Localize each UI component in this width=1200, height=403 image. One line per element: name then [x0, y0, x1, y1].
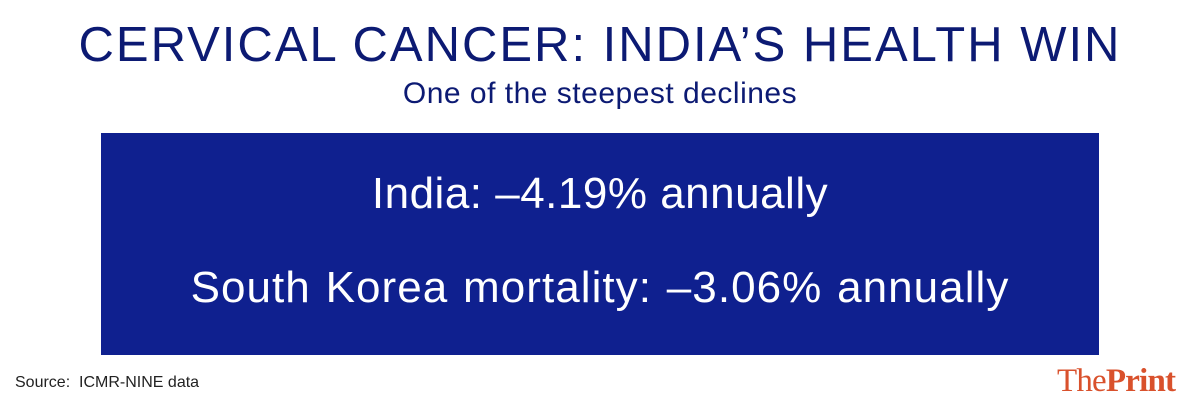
- subtitle: One of the steepest declines: [403, 77, 797, 110]
- logo: ThePrint: ThePrint: [1057, 363, 1175, 399]
- stat: India: India: –4.19% annually: [372, 169, 828, 218]
- stat: South Korea: South Korea mortality: –3.06% annually: [191, 263, 1009, 312]
- panel: stats box: [101, 133, 1099, 355]
- title: CERVICAL CANCER: INDIA’S HEALTH WIN: [79, 18, 1121, 72]
- source: Source: ICMR-NINE data: [15, 374, 199, 391]
